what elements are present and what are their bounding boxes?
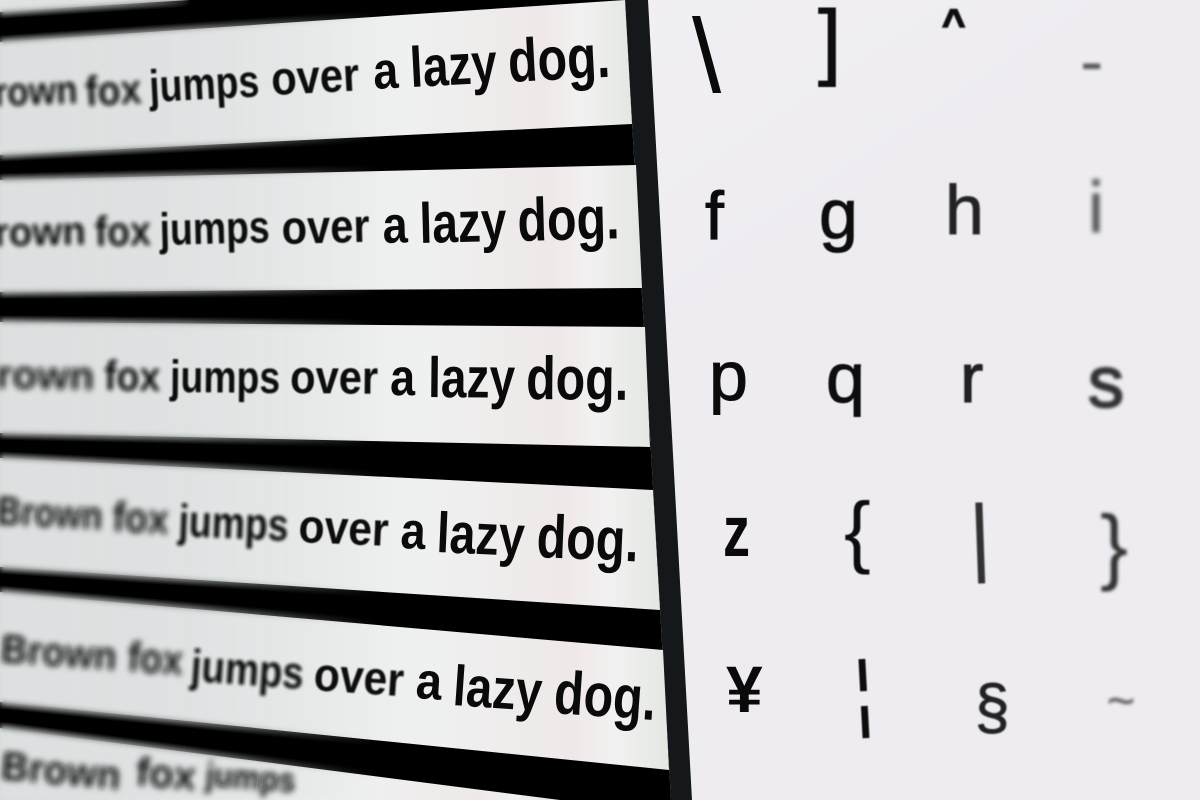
specimen line 6 bbox=[0, 744, 297, 800]
specimen line 3: dog. bbox=[526, 344, 628, 413]
specimen line 4: jumps bbox=[177, 495, 290, 551]
specimen line 5 bbox=[0, 627, 659, 733]
glyph grid row 1 bbox=[692, 0, 1103, 115]
glyph grid row 5: § bbox=[975, 673, 1009, 742]
specimen line 5: over bbox=[312, 647, 406, 706]
specimen line 4: over bbox=[298, 499, 390, 556]
specimen line 5: fox bbox=[126, 633, 185, 684]
specimen line 1: over bbox=[270, 47, 360, 105]
glyph grid row 1: ^ bbox=[942, 2, 965, 46]
glyph grid row 2: f bbox=[705, 178, 724, 254]
glyph grid row 3: q bbox=[826, 339, 865, 417]
specimen line 2 bbox=[0, 183, 620, 256]
glyph grid row 4: | bbox=[967, 488, 993, 584]
specimen line 6: Brown bbox=[0, 744, 123, 798]
glyph grid row 2: i bbox=[1088, 168, 1104, 248]
specimen line 1 bbox=[0, 22, 612, 115]
glyph grid row 5 bbox=[726, 644, 1135, 742]
specimen line 4: fox bbox=[112, 493, 170, 543]
specimen line 1: a bbox=[372, 42, 401, 101]
specimen line 4: dog. bbox=[535, 502, 640, 574]
white strip 4 bbox=[0, 458, 660, 610]
out-of-focus layer over left side of strips bbox=[0, 0, 366, 774]
specimen line 6: fox bbox=[134, 750, 198, 799]
white strip 2 bbox=[0, 165, 642, 292]
white strip 3 bbox=[0, 322, 650, 447]
specimen line 4: lazy bbox=[435, 501, 526, 569]
glyph grid row 4: } bbox=[1100, 498, 1128, 592]
specimen line 3: over bbox=[290, 350, 378, 404]
specimen line 2: over bbox=[281, 199, 370, 254]
specimen line 1: jumps bbox=[147, 55, 260, 112]
specimen line 5: Brown bbox=[0, 627, 118, 679]
specimen line 5: lazy bbox=[451, 654, 545, 724]
left panel: black backing bbox=[0, 0, 671, 800]
glyph grid row 2: g bbox=[819, 175, 858, 253]
specimen line 4: a bbox=[399, 502, 428, 561]
glyph grid row 5: ¦ bbox=[850, 644, 877, 739]
glyph grid row 3 bbox=[709, 337, 1124, 423]
specimen line 5: dog. bbox=[552, 658, 659, 733]
specimen line 3: jumps bbox=[169, 351, 280, 403]
specimen line 1: fox bbox=[84, 65, 143, 115]
glyph grid row 2: h bbox=[945, 171, 984, 249]
specimen line 3: lazy bbox=[428, 346, 516, 411]
glyph grid row 4: { bbox=[844, 486, 871, 575]
white strip 5 bbox=[0, 592, 669, 770]
specimen line 2: a bbox=[382, 196, 409, 255]
glyph grid row 5: ~ bbox=[1107, 675, 1135, 728]
specimen line 1: lazy bbox=[408, 32, 499, 100]
specimen line 2: dog. bbox=[517, 183, 620, 254]
white strip 6 bbox=[0, 728, 560, 800]
specimen line 5: jumps bbox=[188, 640, 306, 699]
specimen line 2: jumps bbox=[158, 201, 270, 255]
screen divider bbox=[625, 0, 692, 800]
specimen line 4 bbox=[0, 489, 640, 574]
specimen line 1: dog. bbox=[506, 22, 612, 95]
specimen line 2: fox bbox=[94, 207, 152, 255]
specimen line 3: a bbox=[390, 349, 416, 407]
specimen line 2: lazy bbox=[419, 190, 508, 256]
glyph grid row 4: z bbox=[723, 492, 750, 572]
white strip 1 bbox=[0, 0, 632, 155]
glyph grid row 1: - bbox=[1080, 22, 1103, 100]
specimen line 3 bbox=[0, 344, 628, 413]
glyph grid row 5: ¥ bbox=[726, 652, 763, 726]
specimen line 6: jumps bbox=[204, 756, 297, 800]
glyph grid row 3: s bbox=[1088, 343, 1124, 423]
glyph grid row 1: \ bbox=[692, 0, 722, 115]
glyph grid row 2 bbox=[705, 168, 1104, 254]
top corner strip bbox=[0, 0, 190, 12]
specimen line 3: fox bbox=[104, 352, 161, 400]
glyph grid row 4 bbox=[723, 486, 1128, 592]
glyph grid row 3: r bbox=[960, 339, 983, 417]
specimen line 5: a bbox=[414, 652, 445, 712]
glyph grid row 3: p bbox=[709, 337, 748, 415]
